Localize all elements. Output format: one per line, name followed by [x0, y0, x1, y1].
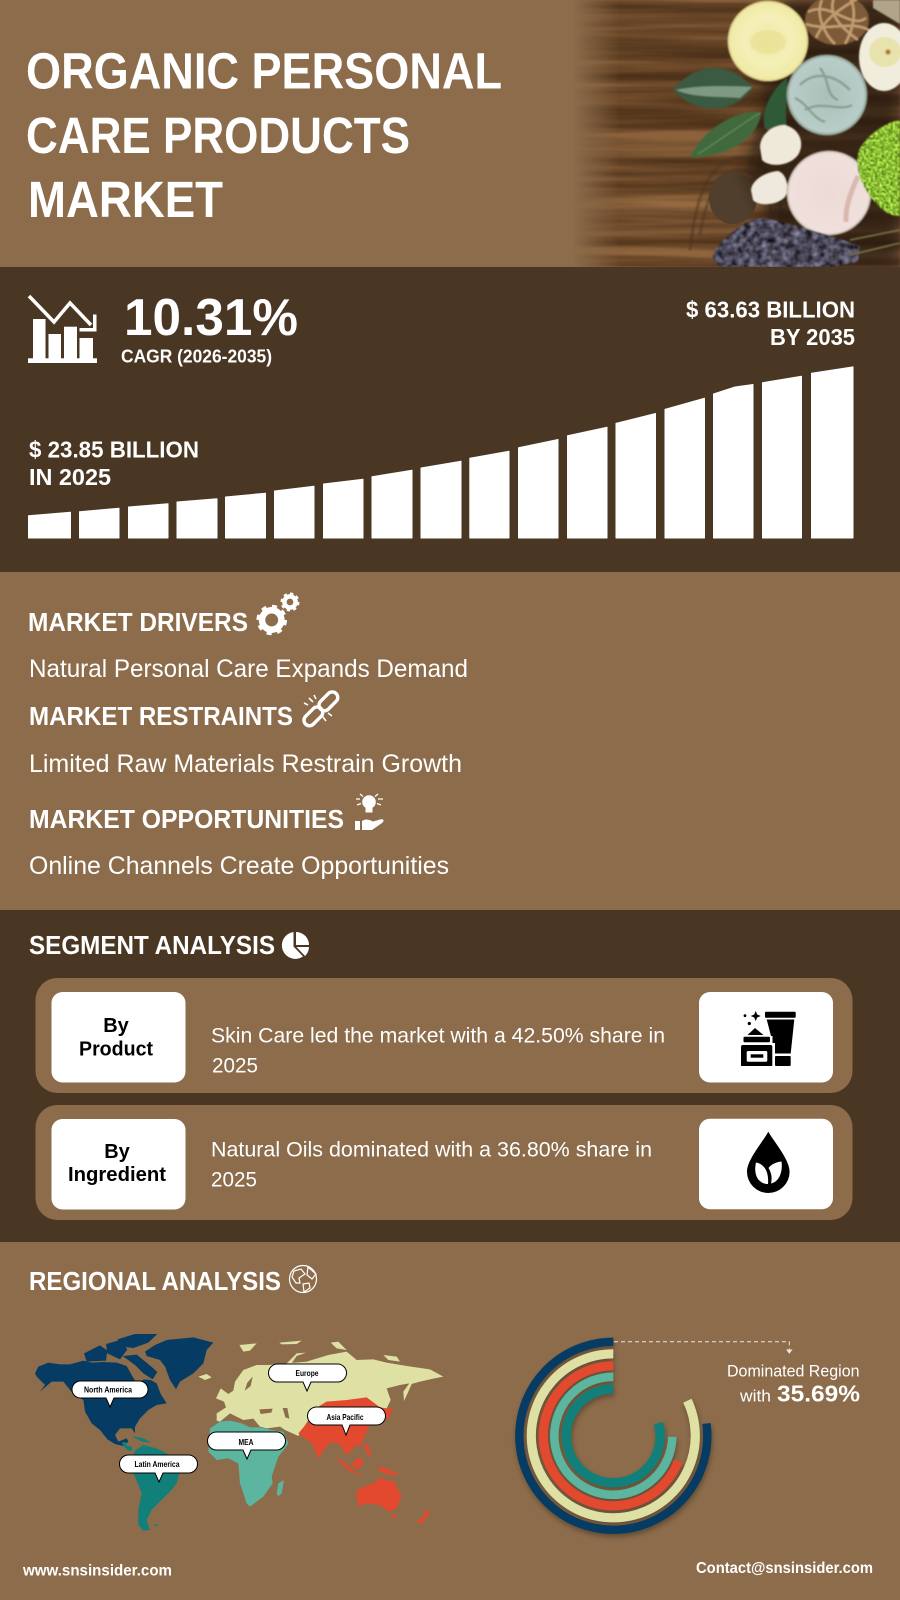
callout: europe	[268, 1364, 346, 1391]
callout: europe: Europe	[296, 1368, 319, 1378]
callout: dominated region share: Dominated Region	[727, 1363, 860, 1381]
icon: gears	[258, 594, 298, 634]
2035 market value: BY 2035	[770, 324, 855, 350]
footer: contact email: Contact@snsinsider.com	[696, 1560, 873, 1577]
callout: middle east and africa: MEA	[238, 1437, 254, 1447]
icon: pie chart	[282, 932, 309, 959]
2035 market value	[686, 297, 855, 350]
text: by ingredient finding	[211, 1139, 652, 1192]
callout: dominated region share: 35.69%	[777, 1381, 860, 1407]
label box: by ingredient: Ingredient	[68, 1164, 166, 1186]
label box: by ingredient: By	[104, 1141, 131, 1163]
map region: north america	[35, 1334, 213, 1446]
text: drivers description: Natural Personal Care Expands Demand	[29, 655, 468, 683]
2025 market value: $ 23.85 BILLION	[29, 437, 199, 463]
text: opportunities description: Online Channels Create Opportunities	[29, 852, 449, 880]
label box: by product: By	[103, 1015, 130, 1037]
panel: segment analysis	[0, 910, 900, 1242]
label box: by ingredient	[52, 1119, 186, 1210]
title: MARKET	[28, 171, 223, 228]
callout: dominated region share	[727, 1363, 860, 1407]
callout: dominated region share: with	[739, 1388, 771, 1406]
callout: north america	[72, 1381, 148, 1407]
icon: idea in hand	[355, 794, 384, 830]
text: by product finding: Skin Care led the market with a 42.50% share in	[211, 1025, 665, 1048]
callout: asia pacific: Asia Pacific	[326, 1412, 364, 1422]
world map	[35, 1334, 443, 1531]
callout: latin america	[119, 1455, 198, 1482]
2035 market value: $ 63.63 BILLION	[686, 297, 855, 323]
panel: regional analysis	[29, 1266, 860, 1533]
label box: by product: Product	[79, 1039, 153, 1061]
icon box: cosmetics	[699, 992, 833, 1082]
title: CARE PRODUCTS	[26, 107, 410, 164]
panel: market size band	[0, 267, 900, 572]
callout: latin america: Latin America	[134, 1459, 180, 1469]
CAGR value: 10.31%	[124, 289, 298, 347]
heading: segment analysis: SEGMENT ANALYSIS	[29, 932, 275, 960]
panel: market dynamics	[28, 594, 468, 880]
heading: market restraints: MARKET RESTRAINTS	[29, 703, 293, 731]
heading: market drivers: MARKET DRIVERS	[28, 609, 248, 637]
segment row: by ingredient	[36, 1105, 852, 1220]
arrow: dashed leader to dominated region	[614, 1342, 792, 1353]
header photo: wood table with cosmetic jars	[560, 0, 900, 267]
map region: europe	[198, 1341, 443, 1436]
text: by ingredient finding: Natural Oils dominated with a 36.80% share in	[211, 1139, 652, 1162]
CAGR label: CAGR (2026-2035)	[121, 347, 272, 367]
2025 market value: IN 2025	[29, 464, 111, 490]
heading: market opportunities: MARKET OPPORTUNITIES	[29, 806, 344, 834]
map region: asia pacific	[298, 1397, 431, 1524]
text: by product finding: 2025	[212, 1055, 258, 1078]
segment row: by product	[36, 978, 852, 1093]
text: restraints description: Limited Raw Materials Restrain Growth	[29, 750, 462, 778]
header background band	[0, 0, 900, 267]
radial chart: regional shares	[519, 1342, 708, 1533]
heading: regional analysis: REGIONAL ANALYSIS	[29, 1268, 281, 1296]
2025 market value	[29, 437, 199, 490]
text: by product finding	[211, 1025, 665, 1078]
title: ORGANIC PERSONAL	[26, 42, 502, 100]
icon: globe	[290, 1266, 316, 1292]
map region: latin america	[122, 1436, 181, 1531]
label box: by product	[52, 992, 186, 1082]
footer: website: www.snsinsider.com	[22, 1563, 172, 1580]
bar chart: market growth	[28, 367, 853, 538]
title	[26, 42, 502, 228]
map region: middle east and africa	[208, 1421, 288, 1507]
text: by ingredient finding: 2025	[211, 1169, 257, 1192]
icon: broken chain	[302, 690, 340, 728]
callout: middle east and africa	[208, 1432, 286, 1459]
callout: asia pacific	[307, 1407, 385, 1435]
icon box: oil drop with leaves	[699, 1119, 833, 1209]
callout: north america: North America	[84, 1384, 132, 1394]
icon: declining chart	[28, 296, 97, 363]
